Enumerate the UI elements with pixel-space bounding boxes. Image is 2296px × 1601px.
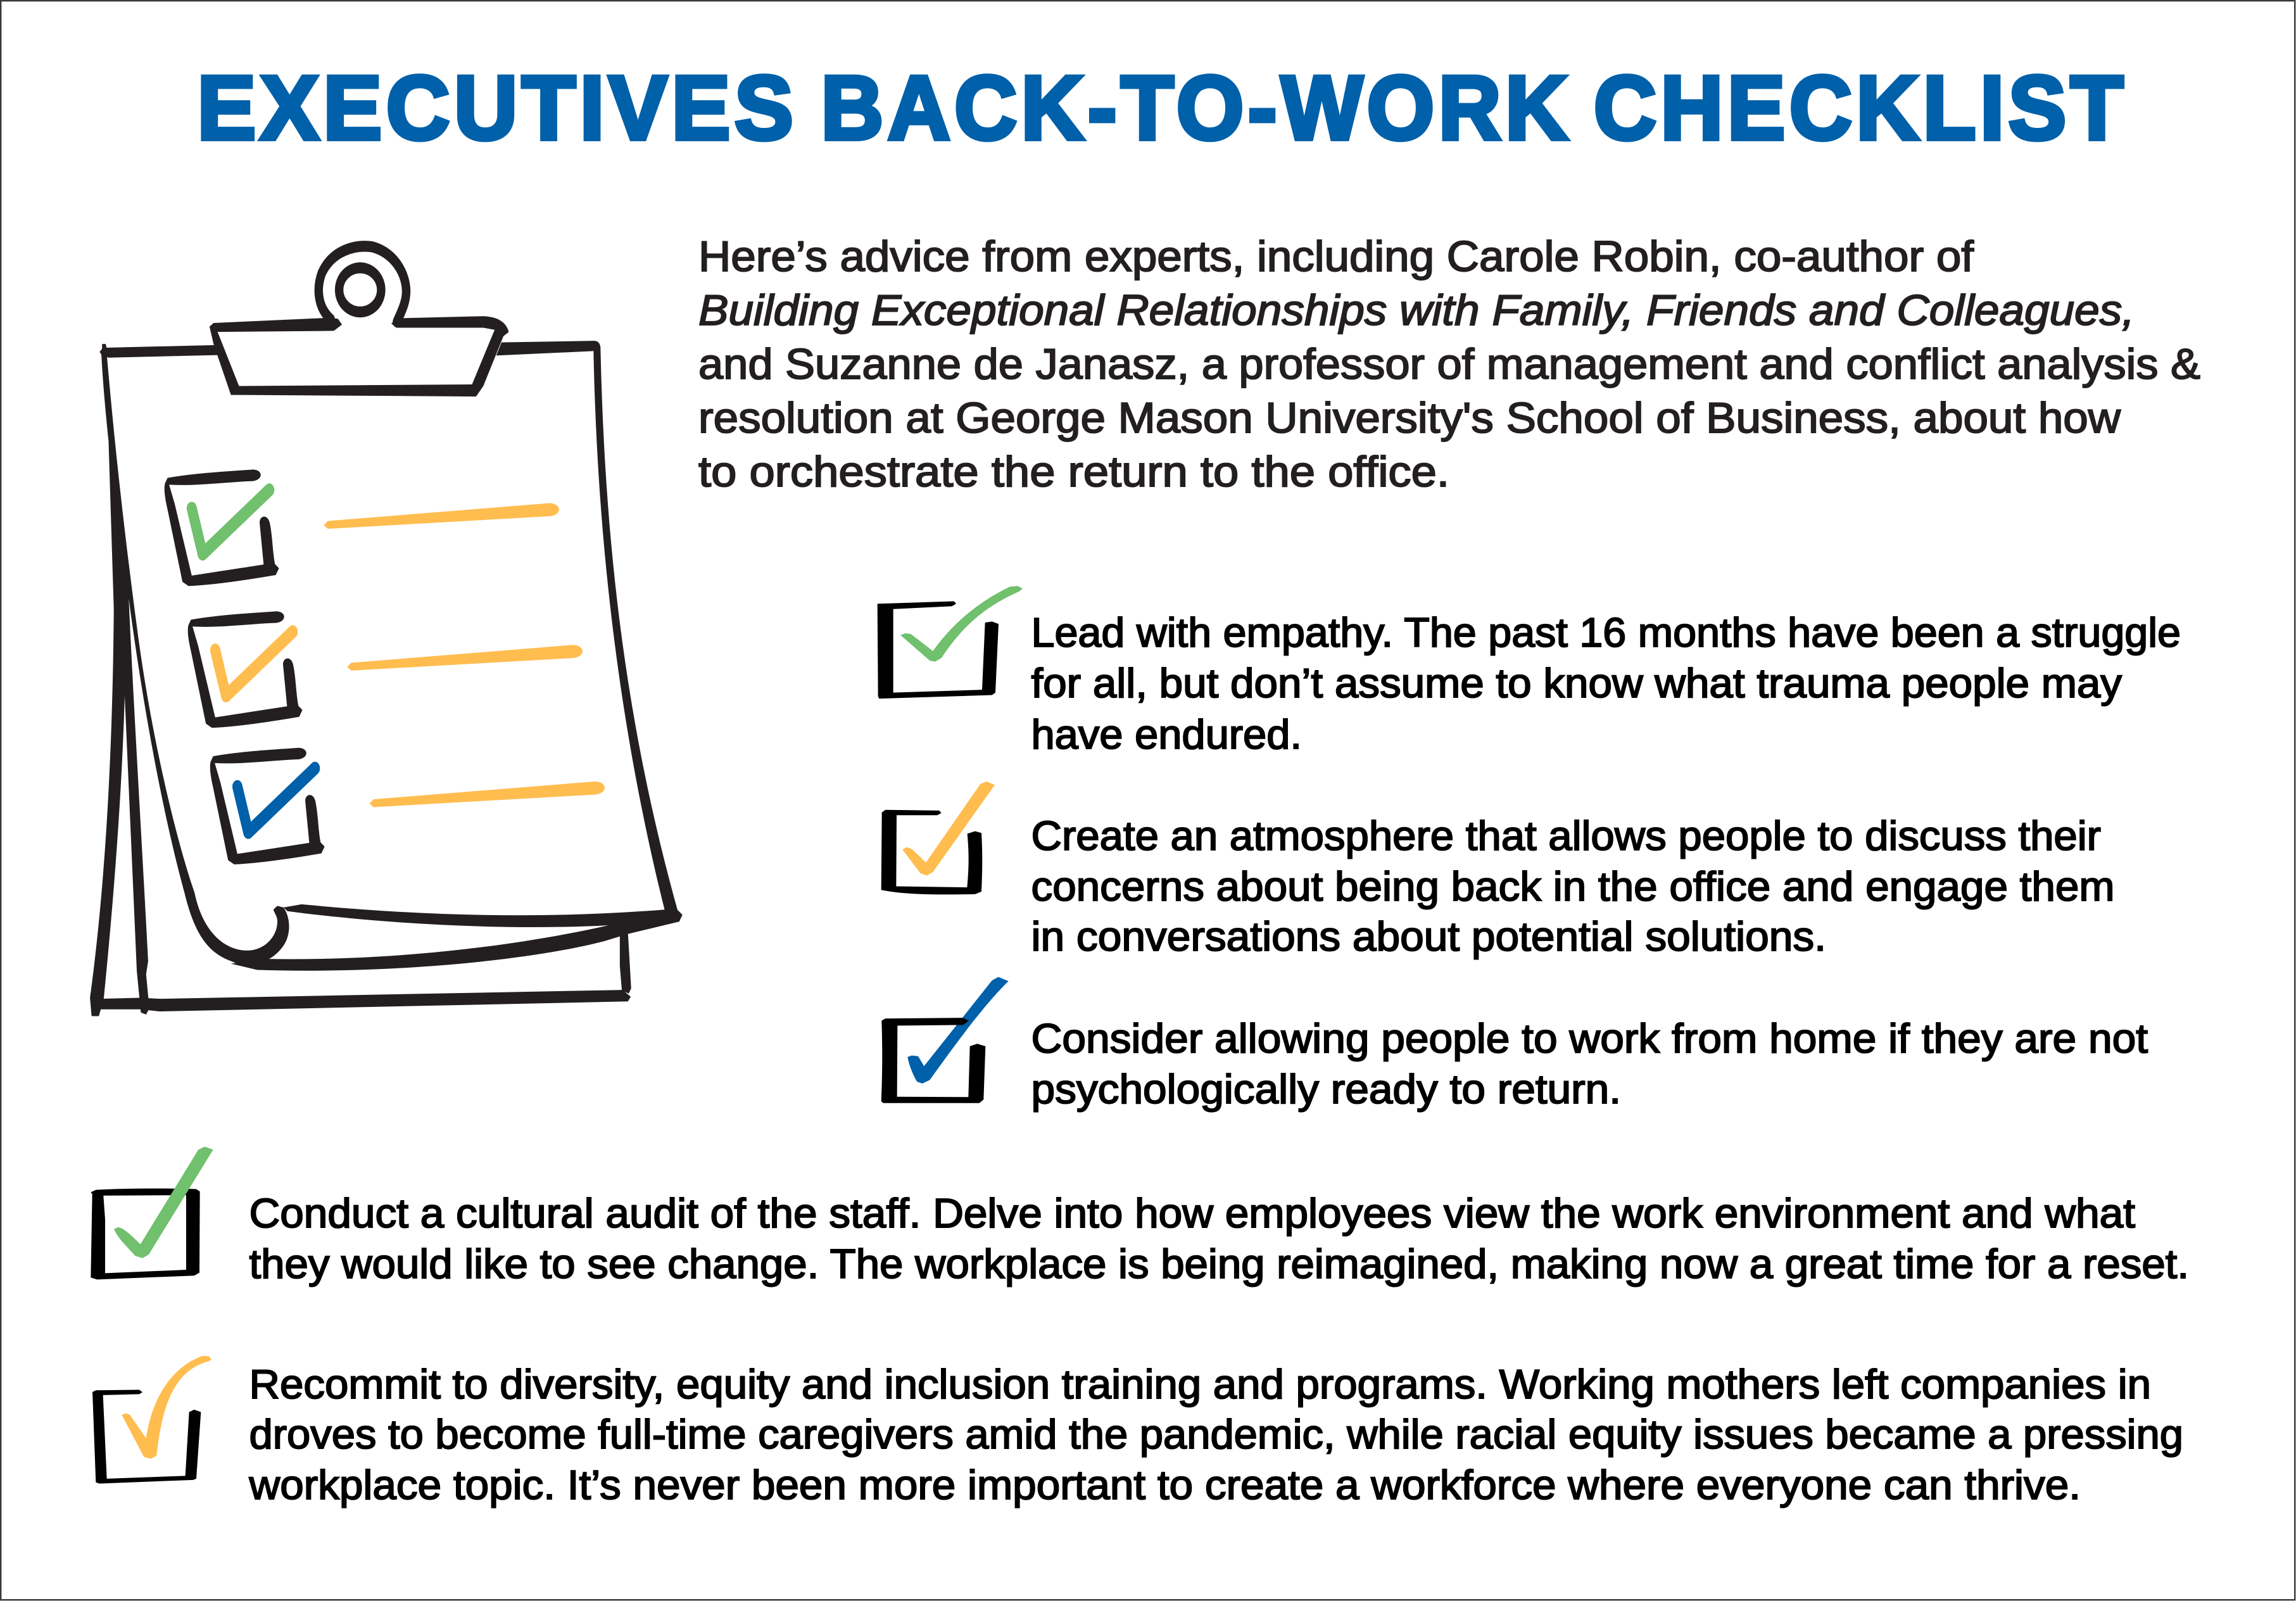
title: CHECKLIST: [1594, 58, 2128, 158]
intro text block: to orchestrate the return to the office.: [698, 448, 1449, 496]
checklist item 2: [1031, 813, 2115, 959]
checklist item 1: [1031, 609, 2181, 757]
checklist item 3: Consider allowing people to work from home if they are not: [1031, 1015, 2148, 1061]
checkbox row 2: [188, 611, 583, 728]
icon: green check 4: [91, 1147, 213, 1279]
checklist item 1: have endured.: [1031, 711, 1302, 757]
icon: green check 1: [878, 586, 1023, 699]
intro text block: resolution at George Mason University's School of Business, about how: [698, 394, 2121, 442]
checklist item 3: psychologically ready to return.: [1031, 1066, 1621, 1112]
checklist item 1: Lead with empathy. The past 16 months have been a struggle: [1031, 609, 2181, 655]
checkbox row 3: [210, 748, 605, 864]
intro text block: [698, 232, 2200, 496]
yellow line: [347, 645, 583, 671]
green tick: [192, 490, 269, 554]
checklist item 5: [248, 1361, 2183, 1508]
checklist item 2: Create an atmosphere that allows people to discuss their: [1031, 813, 2101, 859]
sheet bottom curl: [99, 904, 683, 1011]
checklist item 2: in conversations about potential solutions.: [1031, 913, 1826, 959]
checkbox row 1: [165, 469, 559, 586]
icon: blue check 3: [881, 977, 1009, 1103]
intro text block: Building Exceptional Relationships with Family, Friends and Colleagues,: [698, 286, 2135, 334]
yellow line: [369, 782, 605, 807]
intro text block: and Suzanne de Janasz, a professor of management and conflict analysis &: [698, 340, 2200, 388]
checklist item 4: they would like to see change. The workplace is being reimagined, making now a great time for a reset.: [249, 1241, 2189, 1287]
yellow line: [324, 503, 559, 529]
title: EXECUTIVES: [198, 58, 798, 158]
checklist item 4: Conduct a cultural audit of the staff. Delve into how employees view the work environment and what: [249, 1190, 2135, 1236]
intro text block: Here’s advice from experts, including Carole Robin, co-author of: [698, 232, 1974, 281]
checklist item 4: [249, 1190, 2189, 1287]
checklist item 2: concerns about being back in the office and engage them: [1031, 863, 2115, 909]
clipboard clip: [210, 246, 508, 396]
blue tick: [237, 768, 315, 832]
icon: yellow check 2: [881, 782, 995, 894]
checklist item 5: droves to become full-time caregivers amid the pandemic, while racial equity issues became a pressing: [249, 1411, 2183, 1457]
sheet top edges: [99, 341, 600, 358]
icon: yellow check 5: [92, 1356, 211, 1484]
sheet left edges: [90, 353, 289, 1016]
yellow tick: [215, 632, 293, 696]
checklist item 3: [1031, 1015, 2148, 1112]
checklist item 5: workplace topic. It’s never been more important to create a workforce where everyone can thrive.: [248, 1462, 2081, 1508]
checklist item 5: Recommit to diversity, equity and inclusion training and programs. Working mothers left companies in: [249, 1361, 2151, 1407]
title: BACK-TO-WORK: [821, 58, 1572, 158]
title: [198, 58, 2128, 158]
sheet right edge: [593, 346, 678, 912]
icon: clipboard illustration: [90, 246, 683, 1016]
checklist item 1: for all, but don’t assume to know what trauma people may: [1031, 660, 2123, 706]
